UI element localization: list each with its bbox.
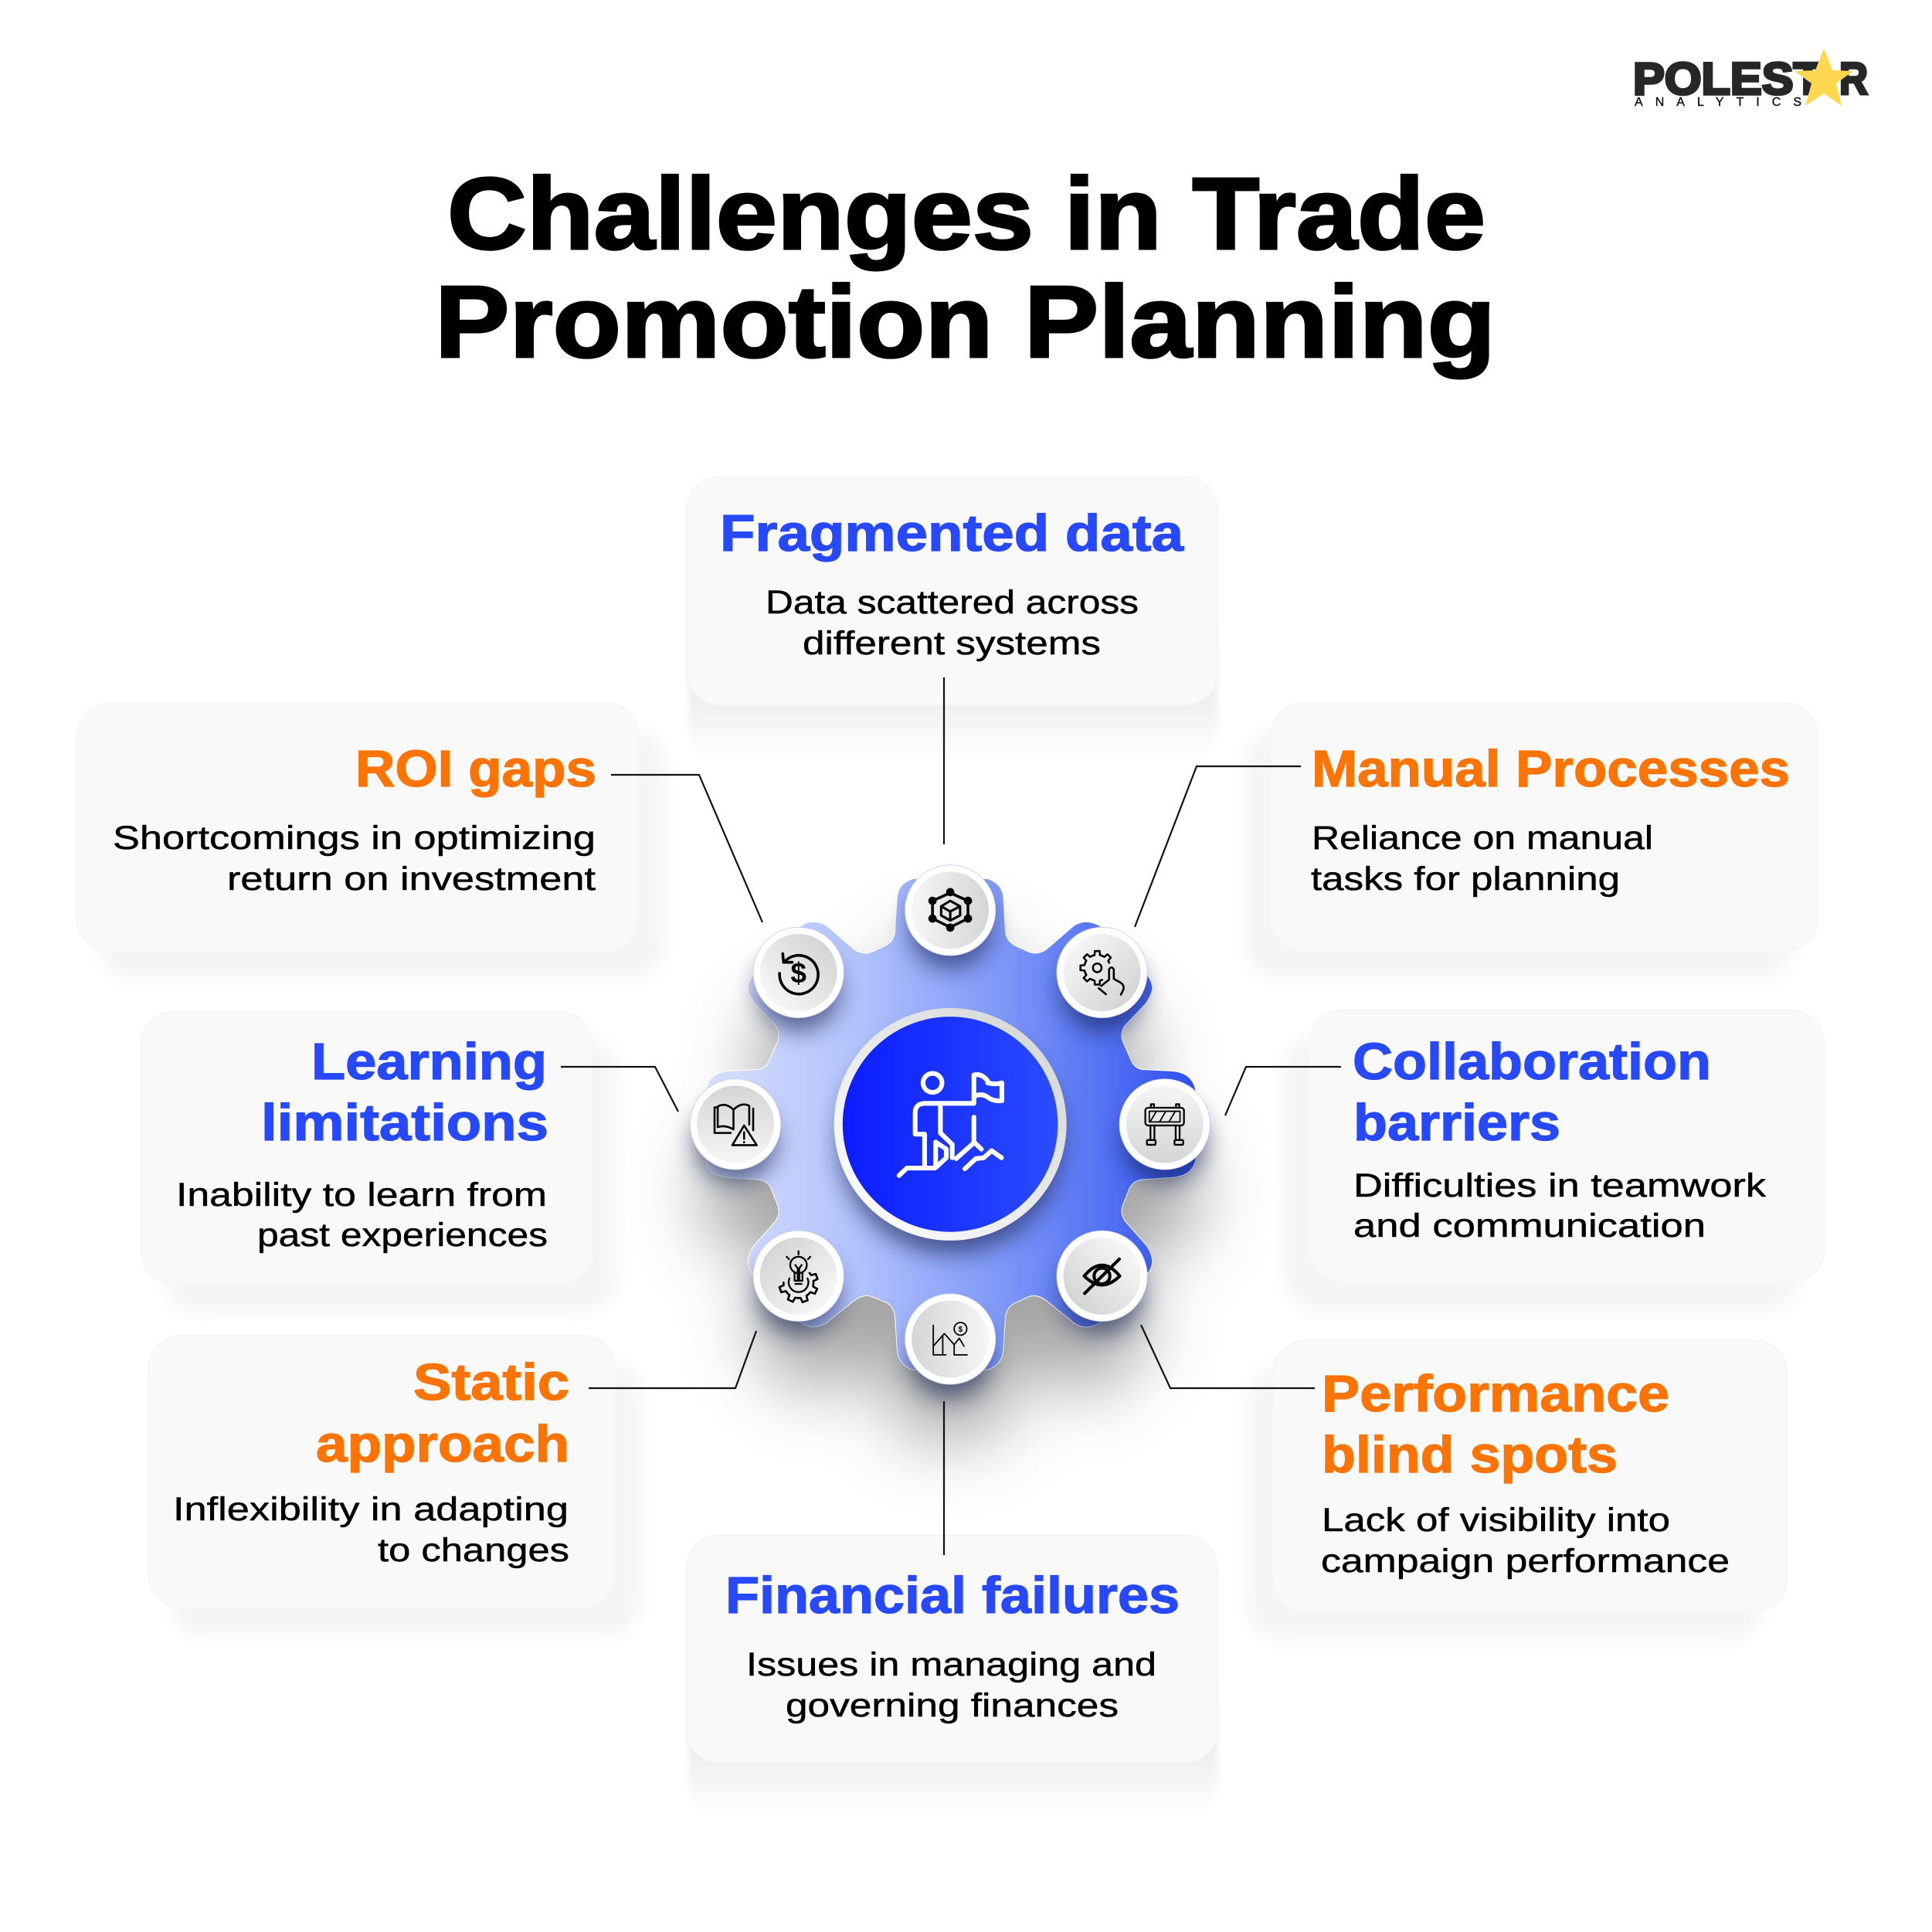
connector: collaboration barriers bbox=[1225, 1067, 1341, 1115]
description line 2: past experiences bbox=[257, 1217, 548, 1254]
description line 1: Inflexibility in adapting bbox=[173, 1491, 569, 1528]
hub ring bbox=[834, 1008, 1067, 1241]
heading: Manual Processes bbox=[1312, 740, 1790, 798]
card bbox=[148, 1336, 616, 1608]
icon: road barrier bbox=[1146, 1104, 1184, 1145]
description line 1: Reliance on manual bbox=[1312, 820, 1653, 857]
title line 2: Promotion Planning bbox=[435, 265, 1496, 379]
description line 1: Lack of visibility into bbox=[1322, 1502, 1670, 1539]
heading line 1: Static bbox=[413, 1353, 569, 1411]
card bbox=[1309, 1010, 1824, 1282]
description line 2: governing finances bbox=[786, 1687, 1119, 1724]
icon: dollar refresh: $ bbox=[790, 957, 806, 989]
description line 2: campaign performance bbox=[1321, 1543, 1730, 1580]
node inner bbox=[912, 871, 989, 949]
connector: ROI gaps bbox=[611, 775, 762, 922]
connector: learning limitations bbox=[561, 1067, 678, 1112]
icon: logo star bbox=[1794, 49, 1853, 106]
panel: Performance blind spots bbox=[1248, 1340, 1787, 1640]
node: learning limitations bbox=[690, 1079, 781, 1170]
icon: person planting flag on summit bbox=[899, 1074, 1002, 1176]
heading line 2: limitations bbox=[261, 1094, 548, 1152]
heading line 2: approach bbox=[316, 1415, 569, 1473]
node: collaboration barriers bbox=[1119, 1079, 1210, 1170]
center hub bbox=[834, 1008, 1067, 1241]
node: fragmented data bbox=[905, 865, 996, 956]
node: performance blind spots bbox=[1047, 1221, 1156, 1331]
node inner bbox=[1126, 1085, 1204, 1163]
heading line 2: barriers bbox=[1353, 1094, 1560, 1152]
logo wordmark: POLEST bbox=[1633, 54, 1822, 104]
heading line 1: Performance bbox=[1322, 1365, 1669, 1423]
circle shadows bbox=[694, 887, 1206, 1398]
node inner bbox=[744, 918, 853, 1027]
heading line 2: blind spots bbox=[1322, 1426, 1618, 1484]
description line 2: different systems bbox=[803, 625, 1101, 662]
panel: Collaboration barriers bbox=[1284, 1010, 1824, 1310]
node inner bbox=[1047, 1221, 1156, 1331]
connector: static approach bbox=[589, 1331, 756, 1388]
connector: performance blind spots bbox=[1141, 1325, 1315, 1388]
description line 2: and communication bbox=[1353, 1207, 1706, 1244]
node: roi gaps bbox=[744, 918, 853, 1027]
card depth bbox=[688, 618, 1217, 759]
description line 1: Data scattered across bbox=[766, 584, 1139, 621]
node inner bbox=[744, 1221, 853, 1331]
node: financial failures bbox=[905, 1294, 996, 1384]
panel: Fragmented data bbox=[687, 477, 1217, 759]
heading line 1: Collaboration bbox=[1353, 1033, 1711, 1091]
node disc bbox=[753, 927, 844, 1018]
gear drop shadow bbox=[706, 946, 1196, 1437]
heading line 1: Learning bbox=[311, 1033, 547, 1091]
panel: Learning limitations bbox=[141, 1012, 617, 1312]
connector: fragmented data bbox=[943, 677, 945, 844]
card bbox=[1271, 703, 1818, 951]
logo bbox=[1633, 49, 1868, 109]
title line 1: Challenges in Trade bbox=[447, 157, 1486, 270]
panel: Manual Processes bbox=[1245, 703, 1818, 979]
icon: book with warning bbox=[715, 1105, 757, 1145]
panel: ROI gaps bbox=[76, 703, 664, 979]
icon: lightbulb in gear bbox=[779, 1251, 819, 1303]
description line 1: Shortcomings in optimizing bbox=[113, 820, 596, 857]
node: static approach bbox=[744, 1221, 853, 1331]
card bbox=[1273, 1340, 1787, 1612]
node inner bbox=[697, 1085, 774, 1163]
panel: Static approach bbox=[148, 1336, 641, 1635]
icon: dollar refresh bbox=[779, 953, 818, 994]
connector: financial failures bbox=[943, 1401, 945, 1555]
heading: ROI gaps bbox=[355, 740, 596, 798]
description line 2: tasks for planning bbox=[1311, 861, 1620, 898]
node disc bbox=[690, 1079, 781, 1170]
node disc bbox=[905, 865, 996, 956]
description line 2: return on investment bbox=[227, 861, 596, 898]
node disc bbox=[1119, 1079, 1210, 1170]
card bbox=[76, 703, 638, 951]
heading: Financial failures bbox=[725, 1567, 1180, 1625]
logo tagline: ANALYTICS bbox=[1635, 96, 1801, 109]
card bbox=[141, 1012, 593, 1284]
icon: crossed eye bbox=[1085, 1259, 1119, 1293]
panel: Financial failures bbox=[687, 1535, 1217, 1815]
node: manual processes bbox=[1047, 918, 1156, 1027]
title bbox=[435, 157, 1496, 379]
description line 1: Inability to learn from bbox=[176, 1177, 547, 1214]
card depth bbox=[164, 1038, 617, 1312]
icon: gear and hand bbox=[1081, 951, 1124, 995]
card bbox=[687, 477, 1217, 705]
card depth bbox=[171, 1361, 641, 1635]
icon: cube network bbox=[930, 889, 971, 930]
node disc bbox=[1057, 1231, 1147, 1322]
description line 1: Difficulties in teamwork bbox=[1353, 1167, 1767, 1204]
gear body bbox=[706, 879, 1196, 1370]
node disc bbox=[905, 1294, 996, 1384]
gear diagram bbox=[690, 865, 1210, 1437]
connector: manual processes bbox=[1135, 766, 1301, 927]
card depth bbox=[100, 729, 664, 979]
card depth bbox=[688, 1676, 1217, 1815]
description line 1: Issues in managing and bbox=[746, 1646, 1156, 1683]
node disc bbox=[753, 1231, 844, 1322]
card depth bbox=[1284, 1037, 1799, 1310]
card depth bbox=[1245, 729, 1793, 979]
node inner bbox=[1047, 918, 1156, 1027]
node disc bbox=[1057, 927, 1147, 1018]
hub blue disc bbox=[843, 1017, 1058, 1232]
card depth bbox=[1248, 1367, 1762, 1640]
logo wordmark end letter: R bbox=[1839, 54, 1868, 104]
node inner bbox=[912, 1300, 989, 1377]
description line 2: to changes bbox=[378, 1532, 569, 1569]
icon: falling chart with coin: $ bbox=[959, 1326, 963, 1334]
card bbox=[687, 1535, 1217, 1762]
heading: Fragmented data bbox=[720, 504, 1184, 562]
